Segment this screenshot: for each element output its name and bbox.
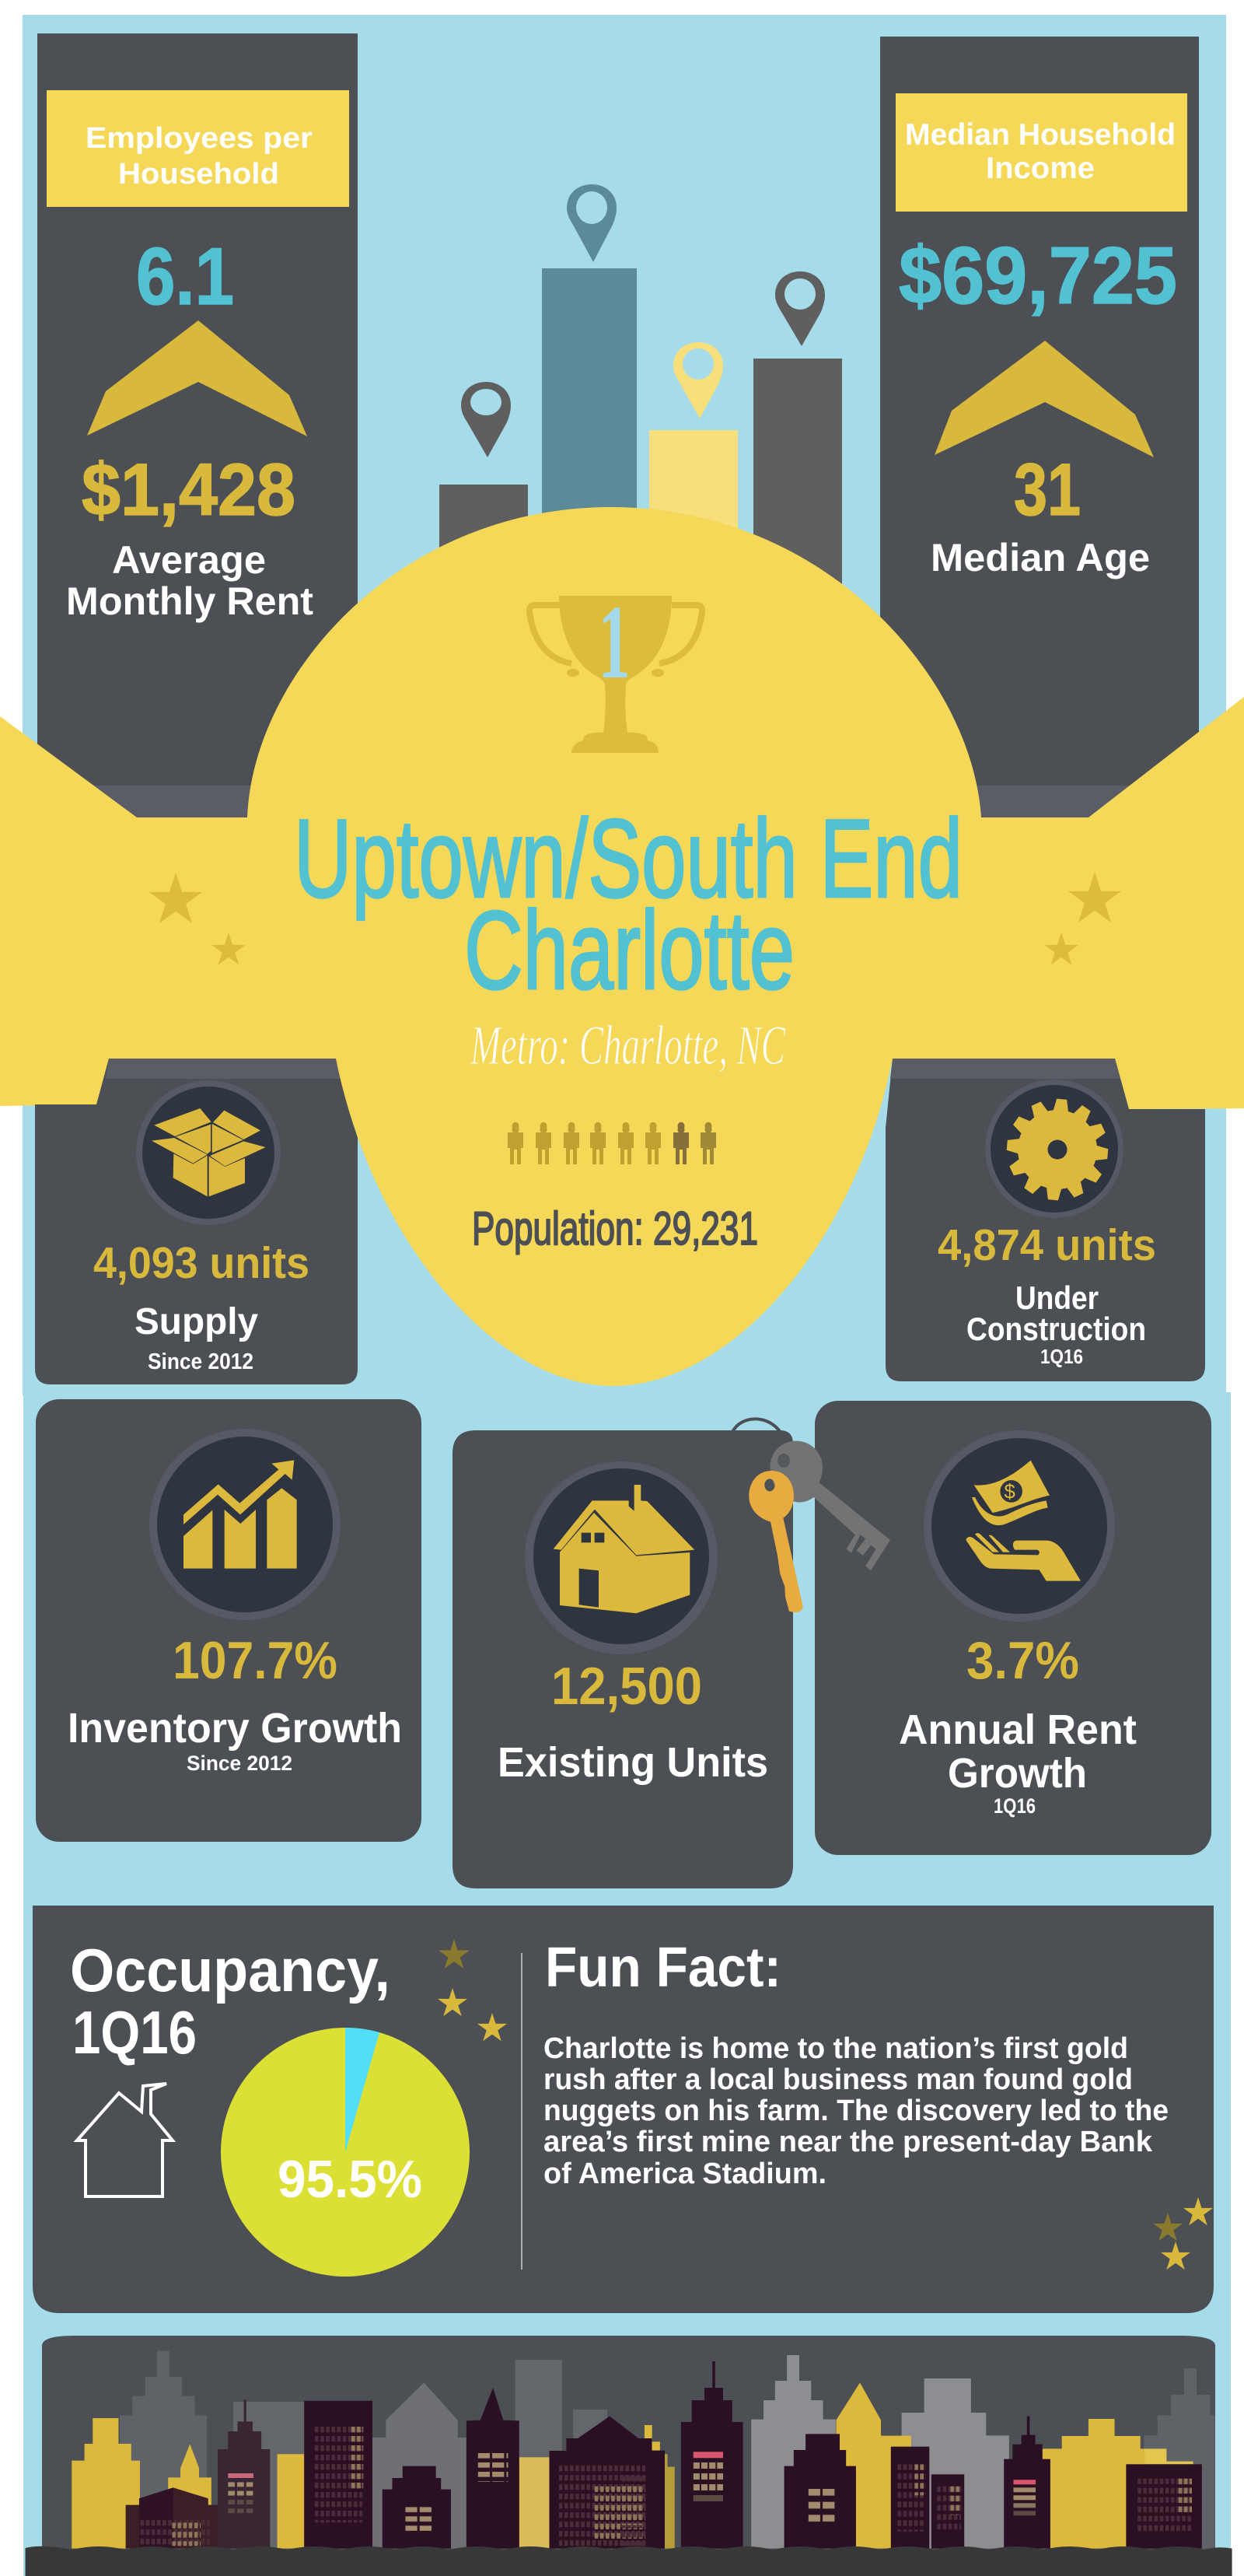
central yellow shape bbox=[247, 507, 981, 1386]
text: fun fact body: of America Stadium. bbox=[543, 2158, 826, 2190]
label: median household income bbox=[905, 118, 1176, 185]
label: employees per household: Household bbox=[118, 158, 279, 191]
text: fun fact body: rush after a local business man found gold bbox=[543, 2063, 1133, 2096]
icon: gear bbox=[985, 1080, 1123, 1218]
title: Charlotte bbox=[464, 889, 795, 1013]
label: under construction bbox=[966, 1279, 1146, 1347]
value: supply units: 4,093 units bbox=[93, 1238, 309, 1288]
text: fun fact body bbox=[543, 2032, 1169, 2190]
label: employees per household bbox=[86, 122, 313, 191]
text: fun fact body: nuggets on his farm. The discovery led to the bbox=[543, 2095, 1169, 2127]
panel: under construction bbox=[886, 1059, 1205, 1381]
stars bbox=[1153, 2197, 1213, 2270]
building windows bbox=[141, 2427, 1192, 2546]
label: average monthly rent bbox=[66, 538, 313, 623]
title bbox=[294, 797, 963, 1013]
value: occupancy: 95.5% bbox=[278, 2150, 422, 2209]
icon: population figures bbox=[508, 1122, 716, 1164]
yellow buildings bbox=[72, 2382, 1193, 2549]
panel: annual rent growth bbox=[815, 1401, 1211, 1855]
heading: occupancy: 1Q16 bbox=[72, 1998, 197, 2067]
panel: employees and rent bbox=[37, 33, 358, 817]
text: fun fact body: Charlotte is home to the nation’s first gold bbox=[543, 2032, 1128, 2065]
label: average monthly rent: Monthly Rent bbox=[66, 579, 313, 623]
value: inventory growth: 107.7% bbox=[173, 1631, 337, 1690]
bar chart with location pins bbox=[439, 184, 842, 747]
icon: grey key bbox=[771, 1441, 890, 1570]
icon: box bbox=[136, 1080, 281, 1225]
icon: key ring bbox=[732, 1419, 781, 1433]
dark buildings bbox=[126, 2361, 1202, 2549]
value: existing units: 12,500 bbox=[551, 1657, 702, 1716]
label: under construction: Construction bbox=[966, 1311, 1146, 1347]
icon: trophy bbox=[529, 584, 702, 753]
icon: orange key bbox=[749, 1471, 803, 1612]
text: fun fact body: area’s first mine near the present-day Bank bbox=[543, 2126, 1153, 2158]
arrow up bbox=[87, 320, 307, 436]
back buildings bbox=[120, 2351, 1215, 2549]
icon: house bbox=[525, 1461, 718, 1654]
panel: city skyline bbox=[26, 2336, 1232, 2576]
label: median household income: Median Household bbox=[905, 118, 1176, 152]
label: existing units: Existing Units bbox=[498, 1739, 768, 1786]
subtitle: metro: Metro: Charlotte, NC bbox=[470, 1014, 786, 1076]
note: 1Q16: 1Q16 bbox=[994, 1794, 1036, 1818]
label: annual rent growth: Annual Rent bbox=[899, 1706, 1137, 1753]
label: under construction: Under bbox=[1015, 1279, 1099, 1316]
icon: rising chart bbox=[149, 1429, 341, 1620]
panel: occupancy and fun fact bbox=[33, 1906, 1214, 2313]
value: average rent: $1,428 bbox=[82, 449, 295, 531]
heading: fun fact: Fun Fact: bbox=[545, 1937, 781, 1999]
label: median household income: Income bbox=[986, 152, 1095, 185]
value: annual rent growth: 3.7% bbox=[966, 1631, 1079, 1690]
value: median age: 31 bbox=[1014, 449, 1081, 531]
label: annual rent growth: Growth bbox=[948, 1750, 1087, 1797]
note: since 2012: Since 2012 bbox=[187, 1752, 292, 1775]
panel: existing units bbox=[453, 1430, 793, 1888]
icon: house outline bbox=[77, 2084, 173, 2196]
skyline bbox=[26, 2351, 1232, 2576]
label: median age: Median Age bbox=[931, 536, 1150, 579]
panel: supply bbox=[35, 1059, 358, 1384]
value: 6.1: 6.1 bbox=[136, 232, 234, 322]
yellow ribbon bbox=[0, 697, 1244, 1109]
label: supply: Supply bbox=[135, 1301, 258, 1342]
numeral on trophy: 1 bbox=[598, 584, 631, 701]
heading: occupancy: Occupancy, bbox=[70, 1936, 390, 2004]
panel: inventory growth bbox=[36, 1399, 421, 1842]
panel: income and age bbox=[880, 37, 1199, 817]
icon: grey key hole bbox=[778, 1454, 790, 1468]
ground bbox=[26, 2546, 1232, 2576]
arrow up bbox=[935, 341, 1154, 457]
population: Population: 29,231 bbox=[472, 1202, 758, 1255]
note: 1Q16: 1Q16 bbox=[1040, 1345, 1083, 1368]
note: since 2012: Since 2012 bbox=[148, 1349, 253, 1374]
label: average monthly rent: Average bbox=[112, 538, 266, 582]
icon: money in hand: $ bbox=[1004, 1480, 1015, 1503]
label: annual rent growth bbox=[899, 1706, 1137, 1797]
value: income: $69,725 bbox=[899, 231, 1177, 321]
pie chart: occupancy bbox=[221, 2028, 470, 2277]
label: inventory growth: Inventory Growth bbox=[68, 1705, 402, 1752]
heading: occupancy bbox=[70, 1936, 390, 2067]
icon: money in hand bbox=[924, 1430, 1115, 1622]
stars bbox=[438, 1939, 507, 2041]
value: construction units: 4,874 units bbox=[938, 1220, 1156, 1270]
label: employees per household: Employees per bbox=[86, 122, 313, 155]
ribbon stars bbox=[149, 872, 1121, 965]
title: Uptown/South End bbox=[294, 797, 963, 921]
